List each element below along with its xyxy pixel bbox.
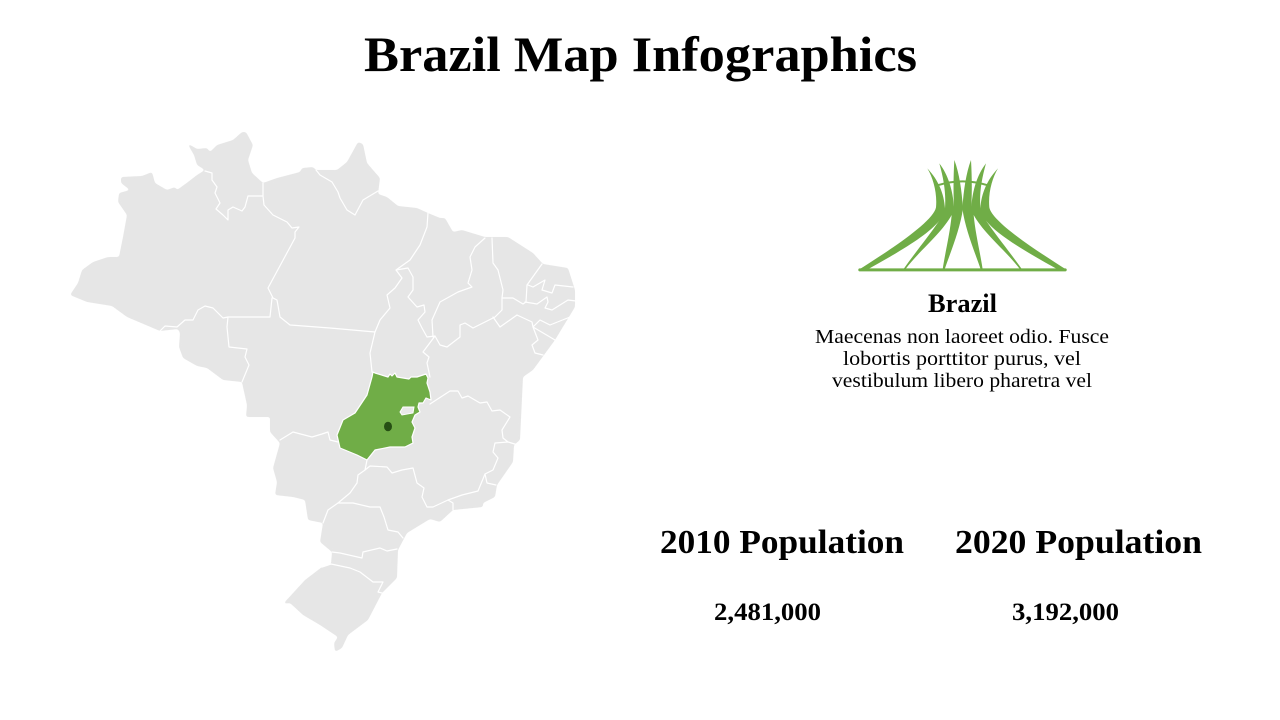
icon: Brasília cathedral — [858, 160, 1067, 271]
description text: vestibulum libero pharetra vel — [832, 371, 1093, 392]
stat: 2020 population: 3,192,000 — [1012, 599, 1119, 626]
stat: 2010 population: 2010 Population — [660, 524, 904, 561]
title: Brazil Map Infographics — [364, 26, 917, 82]
stat: 2020 population: 2020 Population — [955, 524, 1202, 561]
description text — [815, 327, 1109, 392]
heading: Brazil: Brazil — [928, 289, 997, 318]
description text: lobortis porttitor purus, vel — [843, 349, 1082, 370]
stat: 2020 population — [955, 524, 1202, 626]
capital marker — [384, 422, 392, 431]
map of Brazil — [70, 132, 576, 652]
highlighted state: Goiás — [337, 372, 431, 460]
description text: Maecenas non laoreet odio. Fusce — [815, 327, 1109, 348]
stat: 2010 population — [660, 524, 904, 626]
country silhouette — [70, 132, 575, 652]
stat: 2010 population: 2,481,000 — [714, 599, 821, 626]
state borders — [160, 170, 576, 593]
federal district — [400, 407, 414, 415]
